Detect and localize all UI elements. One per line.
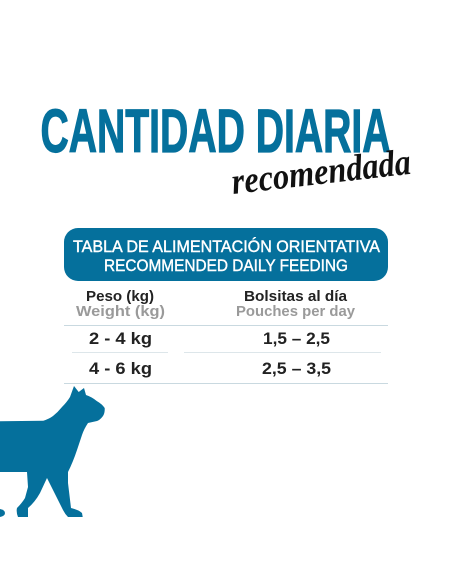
table row: 4 to 6 kg: 2,5 – 3,5 (262, 359, 331, 378)
column header: pouches (236, 288, 356, 320)
column header: pouches: Bolsitas al día (244, 288, 348, 305)
column header: pouches: Pouches per day (236, 303, 356, 320)
subtitle: recomendada: recomendada (229, 142, 413, 203)
column header: weight (76, 288, 165, 320)
banner heading: english: RECOMMENDED DAILY FEEDING (104, 257, 348, 275)
panel: table banner (64, 228, 388, 281)
table row: 2 to 4 kg: 1,5 – 2,5 (263, 329, 330, 348)
table row: 2 to 4 kg (89, 329, 330, 348)
column header: weight: Peso (kg) (86, 288, 154, 305)
table row: 4 to 6 kg (89, 359, 331, 378)
icon: cat silhouette (0, 386, 105, 517)
table row: 2 to 4 kg: 2 - 4 kg (89, 329, 152, 348)
table row: 4 to 6 kg: 4 - 6 kg (89, 359, 152, 378)
banner heading: spanish: TABLA DE ALIMENTACIÓN ORIENTATIVA (73, 237, 380, 256)
column header: weight: Weight (kg) (76, 303, 165, 320)
